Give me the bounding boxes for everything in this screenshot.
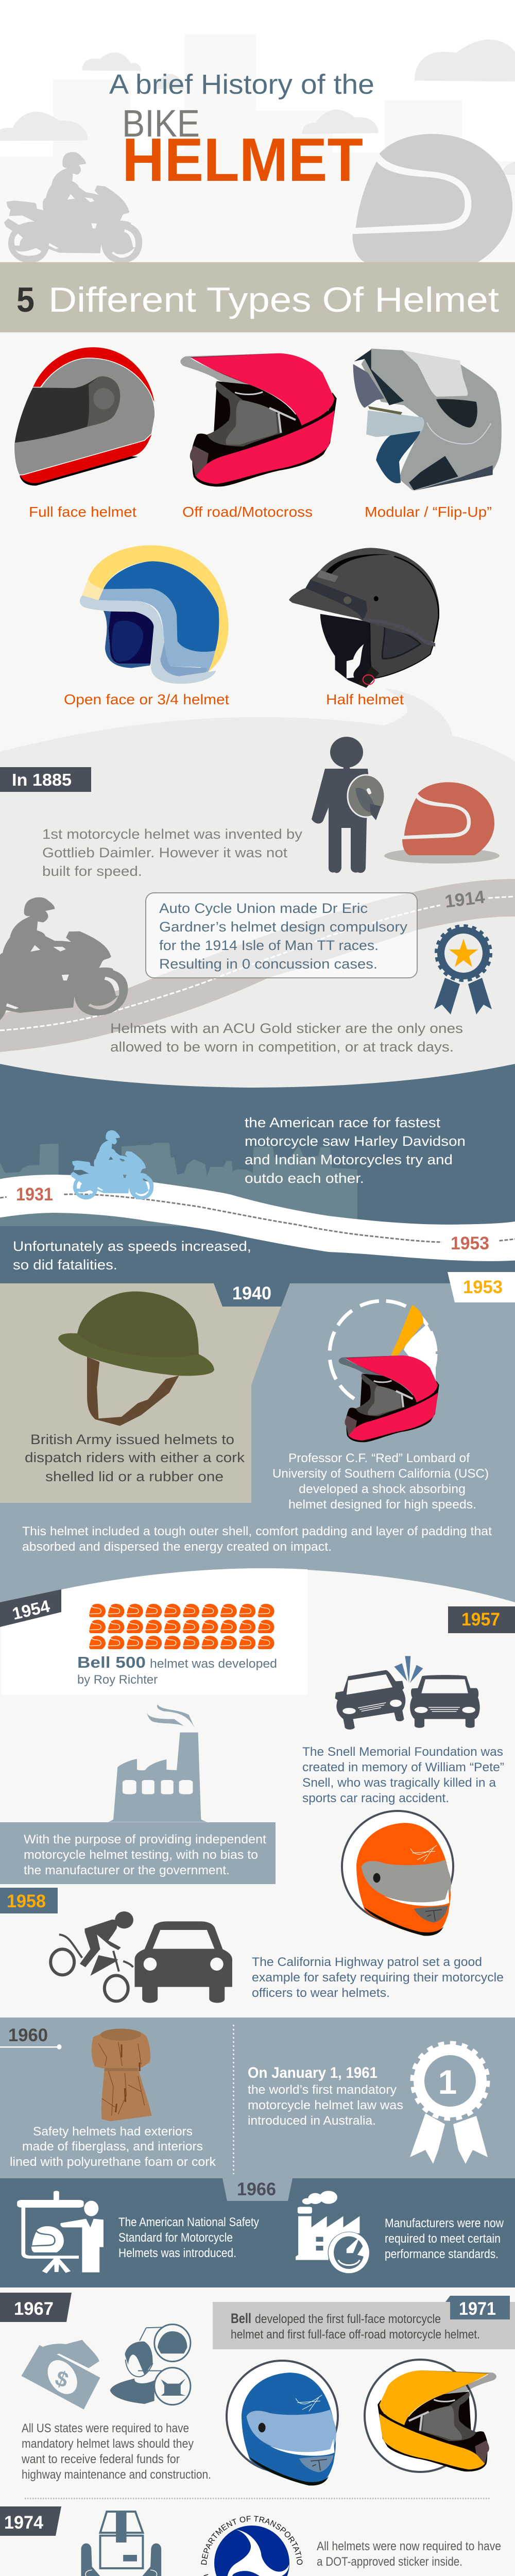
- text: January 1 1961: On January 1, 1961: [248, 2064, 377, 2081]
- text: fatalities: so did fatalities.: [13, 1257, 117, 1273]
- text: outer shell: This helmet included a tough outer shell, comfort padding and layer of padding that: [22, 1524, 492, 1538]
- text: all US states: highway maintenance and construction.: [22, 2468, 211, 2482]
- motorcycle rider on road: [0, 887, 128, 1032]
- panel: 1957: 1957: [461, 1609, 500, 1630]
- icon: money and handshake: [21, 2340, 100, 2410]
- panel: 1971: 1971: [459, 2299, 496, 2319]
- text: Bell 500: helmet was developed: [150, 1657, 277, 1671]
- city skyline: [0, 1143, 357, 1226]
- helmet: modular: [353, 349, 502, 491]
- icon: yellow off-road helmet: [365, 2360, 496, 2472]
- text: fatalities: Unfortunately as speeds increased,: [13, 1239, 251, 1254]
- helmet captions row two: [64, 691, 404, 707]
- road 1914: 1914: [443, 887, 486, 912]
- motorcycle rider silhouette: [4, 152, 142, 263]
- panel: 1967: [0, 2293, 211, 2482]
- panel: 1940: 1940: [232, 1283, 271, 1303]
- callout: Auto Cycle Union: Resulting in 0 concussion cases.: [159, 956, 377, 972]
- text: Professor Lombard: developed a shock absorbing: [299, 1482, 466, 1496]
- icon: cork: [92, 2029, 152, 2121]
- slate section backdrop 1940-1953: [0, 1283, 515, 1644]
- text: ACU gold sticker: Helmets with an ACU Gold sticker are the only ones: [110, 1021, 463, 1036]
- panel: 1954: [0, 1568, 307, 1695]
- panel: independent testing: motorcycle helmet testing, with no bias to: [24, 1848, 258, 1862]
- year tag: In 1885: [0, 767, 91, 792]
- panel: independent testing: With the purpose of providing independent: [24, 1833, 266, 1846]
- year: 1953 road: 1953: [451, 1233, 489, 1253]
- text: Bell 500: by Roy Richter: [77, 1673, 158, 1687]
- year: 1931: 1931: [16, 1184, 53, 1205]
- text: manufacturers: performance standards.: [385, 2247, 499, 2261]
- text: ACU gold sticker: [110, 1021, 463, 1055]
- year: 1960: 1960: [8, 2025, 48, 2045]
- icon: red helmet on plinth: [384, 782, 500, 863]
- panel: 1953: [22, 1272, 515, 1554]
- dome 1954-1957: [0, 1568, 515, 1700]
- text: Snell Foundation: [302, 1745, 504, 1805]
- callout: Auto Cycle Union: Gardner’s helmet design compulsory: [159, 919, 408, 935]
- panel: independent testing: the manufacturer or the government.: [24, 1863, 230, 1877]
- text: safety helmets: [10, 2125, 216, 2169]
- icon: money and handshake: $: [52, 2365, 72, 2393]
- title: A brief History of the: [109, 69, 374, 100]
- text: British Army: British Army issued helmets to: [30, 1432, 234, 1447]
- text: January 1 1961: [248, 2064, 403, 2128]
- text: American race: [245, 1115, 466, 1186]
- text: British Army: shelled lid or a rubber one: [45, 1469, 224, 1484]
- text: California Highway patrol: The California Highway patrol set a good: [252, 1955, 482, 1969]
- text: all US states: mandatory helmet laws should they: [22, 2437, 194, 2451]
- text: Professor Lombard: Professor C.F. “Red” Lombard of: [288, 1451, 470, 1465]
- text: Snell Foundation: sports car racing accident.: [302, 1791, 449, 1805]
- white road with dashes: [0, 1175, 515, 1261]
- text: national safety standard: [118, 2215, 259, 2260]
- text: American race: the American race for fastest: [245, 1115, 441, 1130]
- panel: speech bubble 1885 and 1914: [0, 688, 515, 1088]
- icon: ACU gold ribbon: [434, 926, 492, 1014]
- title: BIKE: [122, 102, 200, 145]
- helmet captions row two: Open face or 3/4 helmet: [64, 691, 229, 707]
- panel: 1953: 1953: [463, 1277, 503, 1297]
- panel: 1954: 1954: [10, 1596, 52, 1623]
- text: California Highway patrol: example for safety requiring their motorcycle: [252, 1971, 504, 1985]
- text: 1885: 1st motorcycle helmet was invented by: [42, 826, 303, 842]
- heading band: 5 different types: [0, 262, 515, 332]
- logo: Department of Transportation seal: DEPARTMENT OF TRANSPORTATION: [201, 2516, 303, 2565]
- callout: Auto Cycle Union: [146, 893, 417, 978]
- text: American race: outdo each other.: [245, 1171, 364, 1186]
- panel: 1966: [0, 2178, 515, 2287]
- icon: blue motorcycle: [71, 1130, 153, 1199]
- icon: car crash: [335, 1656, 480, 1730]
- panel: independent testing: [0, 1822, 276, 1884]
- text: Professor Lombard: helmet designed for high speeds.: [288, 1498, 476, 1512]
- icon: number one rosette: 1: [438, 2063, 457, 2101]
- text: British Army: [25, 1432, 245, 1484]
- text: Bell first full-face: [231, 2311, 480, 2342]
- panel: 1966: 1966: [237, 2179, 276, 2199]
- panel: 1974: 1974: [4, 2513, 44, 2533]
- text: Professor Lombard: [272, 1451, 489, 1512]
- text: ACU gold sticker: allowed to be worn in competition, or at track days.: [110, 1039, 454, 1055]
- icon: hands holding box: [81, 2512, 161, 2576]
- text: DOT sticker: a DOT-approved sticker inside.: [317, 2555, 462, 2569]
- text: January 1 1961: introduced in Australia.: [248, 2114, 376, 2128]
- helmet captions row one: Off road/Motocross: [182, 504, 313, 520]
- icon: factory and gauge: [296, 2191, 370, 2274]
- panel: 1958: 1958: [7, 1891, 46, 1911]
- text: Bell 500: [77, 1653, 277, 1687]
- panel: 1940: [0, 1283, 290, 1503]
- text: January 1 1961: motorcycle helmet law was: [248, 2098, 403, 2112]
- panel: 1960 and 1961: [0, 2018, 515, 2178]
- text: American race: motorcycle saw Harley Davidson: [245, 1133, 466, 1149]
- dark blue section backdrop: [0, 1051, 515, 1288]
- text: 1885: [42, 826, 303, 879]
- text: outer shell: absorbed and dispersed the energy created on impact.: [22, 1540, 332, 1554]
- icon: orange helmet in circle: [342, 1811, 453, 1936]
- text: fatalities: [13, 1239, 251, 1273]
- helmet captions row one: Modular / “Flip-Up”: [365, 504, 492, 520]
- panel: 1931 race: [0, 1115, 515, 1273]
- helmet: off road: [180, 353, 337, 487]
- helmet: open face: [80, 545, 229, 684]
- text: Bell first full-face: helmet and first full-face off-road motorcycle helmet.: [231, 2328, 480, 2342]
- header panel: [0, 0, 515, 263]
- text: national safety standard: Standard for Motorcycle: [118, 2231, 233, 2245]
- text: January 1 1961: the world’s first mandatory: [248, 2083, 397, 2097]
- text: British Army: dispatch riders with either a cork: [25, 1450, 245, 1465]
- panel: 1958: [0, 1888, 504, 2003]
- heading band: 5 different types: Different Types Of Helmet: [48, 280, 499, 319]
- text: manufacturers: required to meet certain: [385, 2232, 501, 2246]
- panel: 1957: [302, 1606, 515, 1936]
- clouds: [0, 40, 515, 175]
- text: national safety standard: The American National Safety: [118, 2215, 259, 2229]
- callout: Auto Cycle Union: for the 1914 Isle of Man TT races.: [159, 938, 379, 953]
- text: national safety standard: Helmets was introduced.: [118, 2246, 236, 2260]
- year: 1960: [0, 2025, 62, 2049]
- text: outer shell: [22, 1524, 492, 1554]
- logo: Department of Transportation seal: [201, 2516, 303, 2576]
- text: 1885: built for speed.: [42, 863, 142, 879]
- title: HELMET: [122, 126, 363, 194]
- text: California Highway patrol: [252, 1955, 504, 2000]
- icon: motorcycle and car collision: [50, 1911, 232, 2003]
- icon: blue full-face helmet: [227, 2361, 338, 2485]
- panel: 1967: 1967: [14, 2299, 54, 2319]
- icon: factory: [108, 1704, 207, 1822]
- large helmet graphic: [352, 134, 512, 262]
- icon: presenter with helmet: [17, 2191, 104, 2274]
- text: Snell Foundation: created in memory of William “Pete”: [302, 1760, 504, 1774]
- panel: 1971: [213, 2296, 515, 2485]
- icon: person on headset: [110, 2325, 191, 2405]
- helmet icon grid: [89, 1604, 274, 1649]
- helmet: half: [289, 548, 439, 688]
- text: safety helmets: made of fiberglass, and interiors: [22, 2140, 203, 2154]
- text: Snell Foundation: Snell, who was tragically killed in a: [302, 1776, 496, 1790]
- helmet: full face: [14, 347, 155, 486]
- text: DOT sticker: [317, 2539, 501, 2569]
- text: Bell first full-face: Bell: [231, 2311, 251, 2326]
- heading band: 5 different types: 5: [16, 280, 35, 319]
- road 1914: [0, 879, 515, 1052]
- text: all US states: [21, 2421, 211, 2482]
- year tag: In 1885: In 1885: [12, 770, 72, 789]
- text: safety helmets: lined with polyurethane foam or cork: [10, 2155, 216, 2169]
- icon: speed gauge with helmet: [330, 1301, 439, 1442]
- text: Snell Foundation: The Snell Memorial Foundation was: [302, 1745, 503, 1759]
- helmet captions row one: [29, 504, 492, 520]
- callout: Auto Cycle Union: Auto Cycle Union made Dr Eric: [159, 901, 368, 916]
- helmet captions row one: Full face helmet: [29, 504, 136, 520]
- text: 1885: Gottlieb Daimler. However it was not: [42, 845, 288, 860]
- icon: person holding helmet: [312, 737, 385, 873]
- icon: army helmet: [58, 1292, 214, 1426]
- text: safety helmets: Safety helmets had exteriors: [33, 2125, 193, 2139]
- title: [109, 69, 374, 194]
- text: Professor Lombard: University of Southern California (USC): [272, 1467, 489, 1481]
- helmet captions row two: Half helmet: [326, 691, 404, 707]
- icon: number one rosette: [410, 2044, 488, 2164]
- text: all US states: want to receive federal funds for: [21, 2452, 180, 2466]
- text: manufacturers: [385, 2216, 504, 2261]
- text: American race: and Indian Motorcycles try and: [245, 1152, 453, 1167]
- text: all US states: All US states were required to have: [22, 2421, 189, 2435]
- text: Bell first full-face: developed the first full-face motorcycle: [255, 2312, 441, 2326]
- text: Bell 500: Bell 500: [77, 1653, 146, 1671]
- text: California Highway patrol: officers to wear helmets.: [252, 1986, 390, 2000]
